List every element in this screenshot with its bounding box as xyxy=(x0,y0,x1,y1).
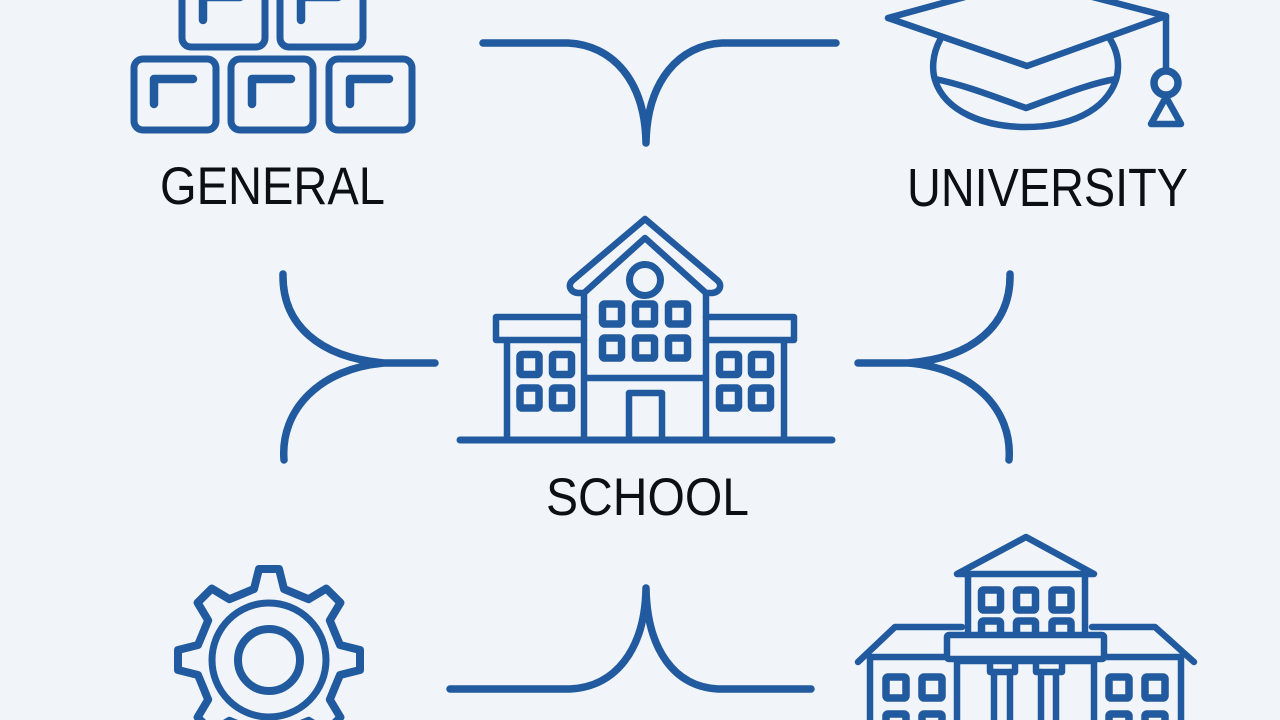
icon: college building xyxy=(858,537,1194,720)
icon: gear xyxy=(178,569,360,720)
label: general: GENERAL xyxy=(160,157,385,216)
label: school: SCHOOL xyxy=(546,468,749,527)
connector: right xyxy=(858,274,1010,460)
connector: bottom xyxy=(450,588,811,689)
connector: left xyxy=(283,274,435,460)
label: university: UNIVERSITY xyxy=(907,158,1188,218)
icon: graduation cap xyxy=(888,0,1181,127)
icon: general blocks xyxy=(134,0,412,130)
connector: top xyxy=(483,43,836,143)
icon: school building xyxy=(460,219,832,440)
